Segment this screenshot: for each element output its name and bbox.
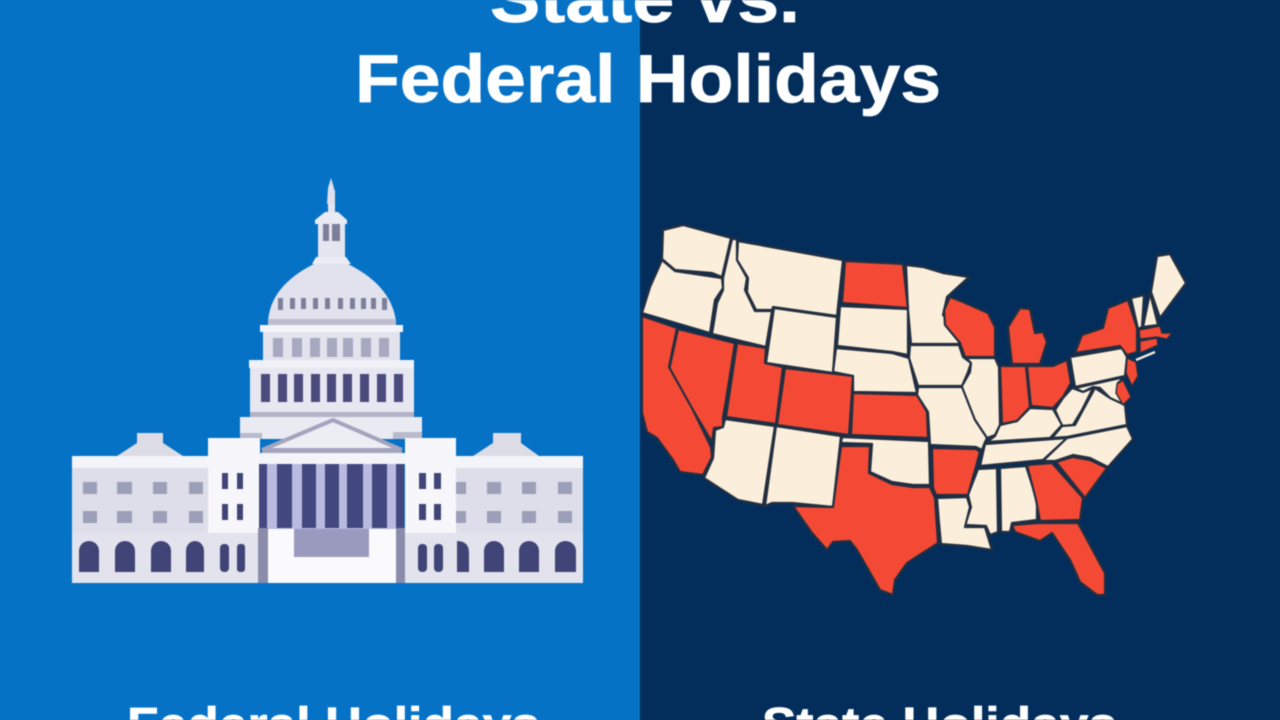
chart: US state map: [642, 225, 1186, 595]
panel: state background: [640, 0, 1280, 720]
icon: US Capitol building: [72, 178, 583, 583]
title: [355, 0, 941, 117]
capitol rotunda drum: [240, 325, 422, 439]
capitol dome and lantern: [268, 178, 396, 325]
long island: [1136, 352, 1155, 360]
capitol left wing: [72, 433, 260, 583]
states in red: [642, 261, 1172, 595]
states in cream: [642, 225, 1186, 550]
capitol central portico: [258, 420, 405, 583]
capitol right wing: [405, 433, 583, 583]
panel: federal background: [0, 0, 640, 720]
title: Federal Holidays: [355, 41, 941, 117]
